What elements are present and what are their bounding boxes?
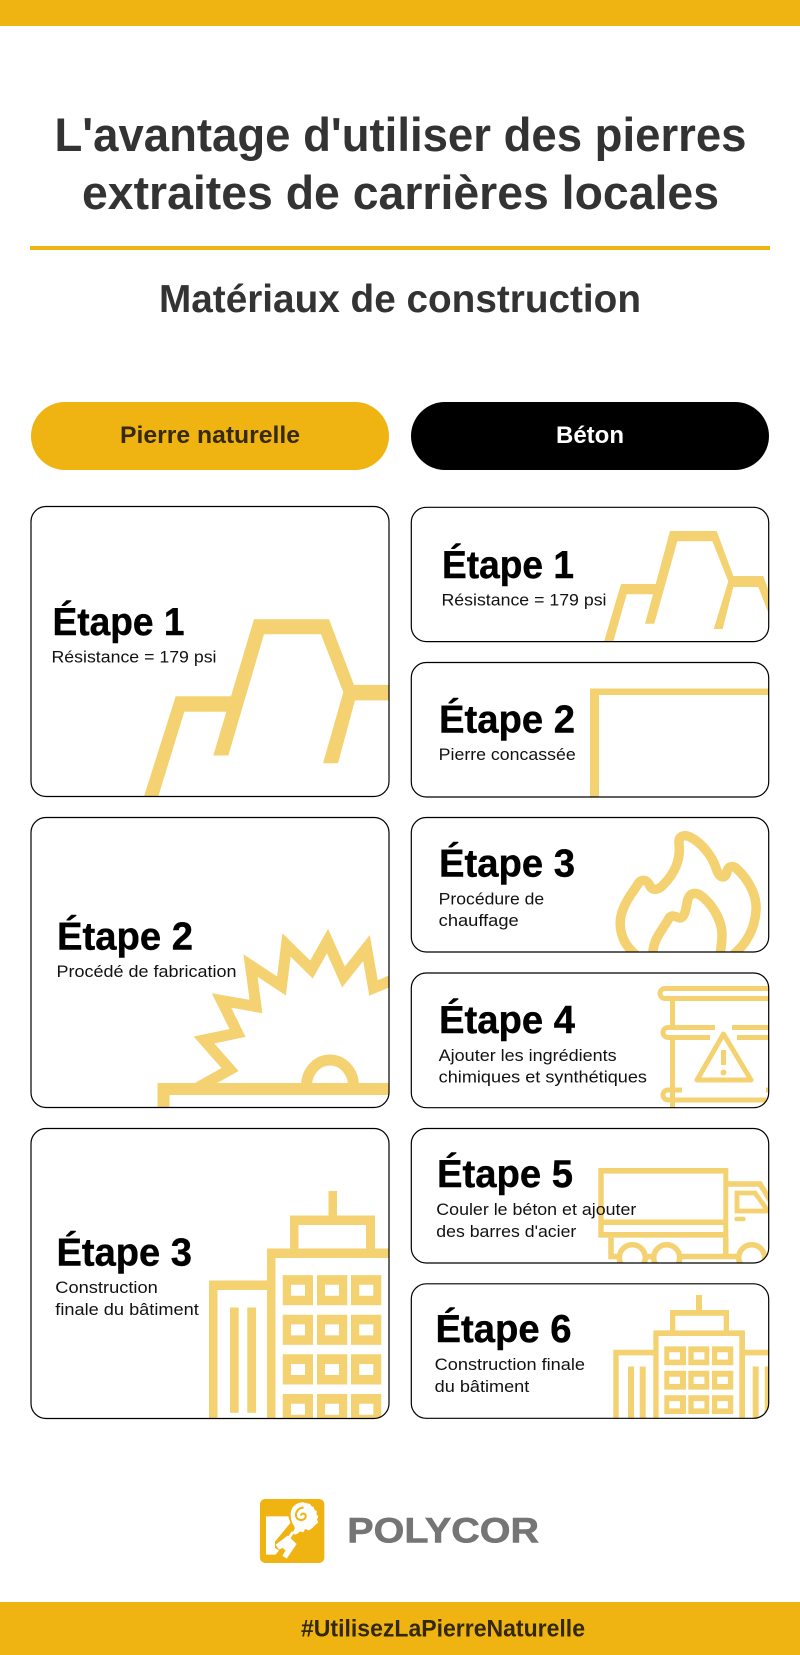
text: procédure: Procédure de bbox=[439, 890, 544, 908]
heading: étape 2: Étape 2 bbox=[57, 914, 193, 958]
icon: saw blade bbox=[164, 941, 395, 1112]
heading: étape 6: Étape 6 bbox=[436, 1307, 572, 1351]
text: construction finale bbox=[435, 1355, 585, 1396]
text: couler le béton: des barres d'acier bbox=[436, 1222, 577, 1241]
icon: quarry mountains bbox=[604, 531, 775, 642]
panel: pierre naturelle étape 1 bbox=[31, 506, 392, 796]
panel: béton étape 2 bbox=[411, 662, 772, 800]
heading: étape 1: Étape 1 bbox=[52, 600, 184, 644]
title: extraites de carrières locales bbox=[82, 166, 719, 219]
text: couler le béton: Couler le béton et ajouter bbox=[436, 1200, 637, 1219]
pill: Béton bbox=[411, 402, 769, 470]
icon dot: warning mark bbox=[720, 1070, 726, 1076]
text: pierre concassée: Pierre concassée bbox=[439, 745, 576, 764]
icon: flame bbox=[620, 836, 756, 955]
logo: Polycor bbox=[260, 1499, 539, 1563]
panel: béton étape 6 bbox=[411, 1284, 772, 1422]
panel: béton étape 5 bbox=[411, 1128, 775, 1271]
text: procédé: Procédé de fabrication bbox=[56, 962, 236, 981]
pill: Pierre naturelle: Pierre naturelle bbox=[120, 422, 300, 449]
top bar bbox=[0, 0, 800, 26]
icon: buildings bbox=[209, 1191, 390, 1424]
icon: crushed stone frame bbox=[590, 688, 772, 800]
text: ingrédients bbox=[439, 1046, 647, 1086]
bottom bar bbox=[0, 1602, 800, 1655]
icon: buildings bbox=[613, 1295, 772, 1422]
text: résistance: Résistance = 179 psi bbox=[442, 590, 606, 609]
title bbox=[54, 108, 746, 219]
heading: étape 3: Étape 3 bbox=[439, 842, 575, 886]
text: construction bbox=[55, 1278, 199, 1319]
panel: béton étape 1 bbox=[411, 507, 775, 642]
text: POLYCOR: POLYCOR bbox=[347, 1511, 539, 1550]
panel: béton étape 3 bbox=[411, 818, 769, 955]
text: ingrédients: Ajouter les ingrédients bbox=[439, 1046, 617, 1065]
icon: quarry mountains bbox=[144, 619, 392, 796]
title: L'avantage d'utiliser des pierres bbox=[54, 108, 746, 161]
icon: chemical barrel with warning bbox=[660, 988, 775, 1110]
heading: étape 4: Étape 4 bbox=[439, 998, 575, 1042]
panel: pierre naturelle étape 3 bbox=[31, 1128, 390, 1424]
icon: truck bbox=[598, 1168, 768, 1262]
panel: pierre naturelle étape 2 bbox=[31, 818, 395, 1112]
subtitle: Matériaux de construction bbox=[159, 278, 641, 321]
text: construction finale: du bâtiment bbox=[435, 1377, 530, 1396]
text: construction: Construction bbox=[55, 1278, 158, 1297]
heading: étape 1: Étape 1 bbox=[442, 543, 574, 587]
hashtag: #UtilisezLaPierreNaturelle bbox=[301, 1616, 585, 1642]
text: ingrédients: chimiques et synthétiques bbox=[439, 1067, 647, 1086]
text: procédure bbox=[439, 890, 544, 930]
text: construction: finale du bâtiment bbox=[55, 1300, 199, 1319]
text: résistance: Résistance = 179 psi bbox=[52, 648, 216, 666]
icon: logo mark bbox=[260, 1499, 324, 1563]
panel: béton étape 4 bbox=[411, 973, 775, 1110]
text: procédure: chauffage bbox=[439, 911, 519, 930]
text: construction finale: Construction finale bbox=[435, 1355, 585, 1374]
pill: Pierre naturelle bbox=[31, 402, 389, 470]
pill: Béton: Béton bbox=[556, 422, 624, 449]
text: couler le béton bbox=[436, 1200, 637, 1241]
heading: étape 3: Étape 3 bbox=[56, 1230, 192, 1274]
heading: étape 5: Étape 5 bbox=[437, 1152, 573, 1196]
heading: étape 2: Étape 2 bbox=[439, 698, 575, 742]
